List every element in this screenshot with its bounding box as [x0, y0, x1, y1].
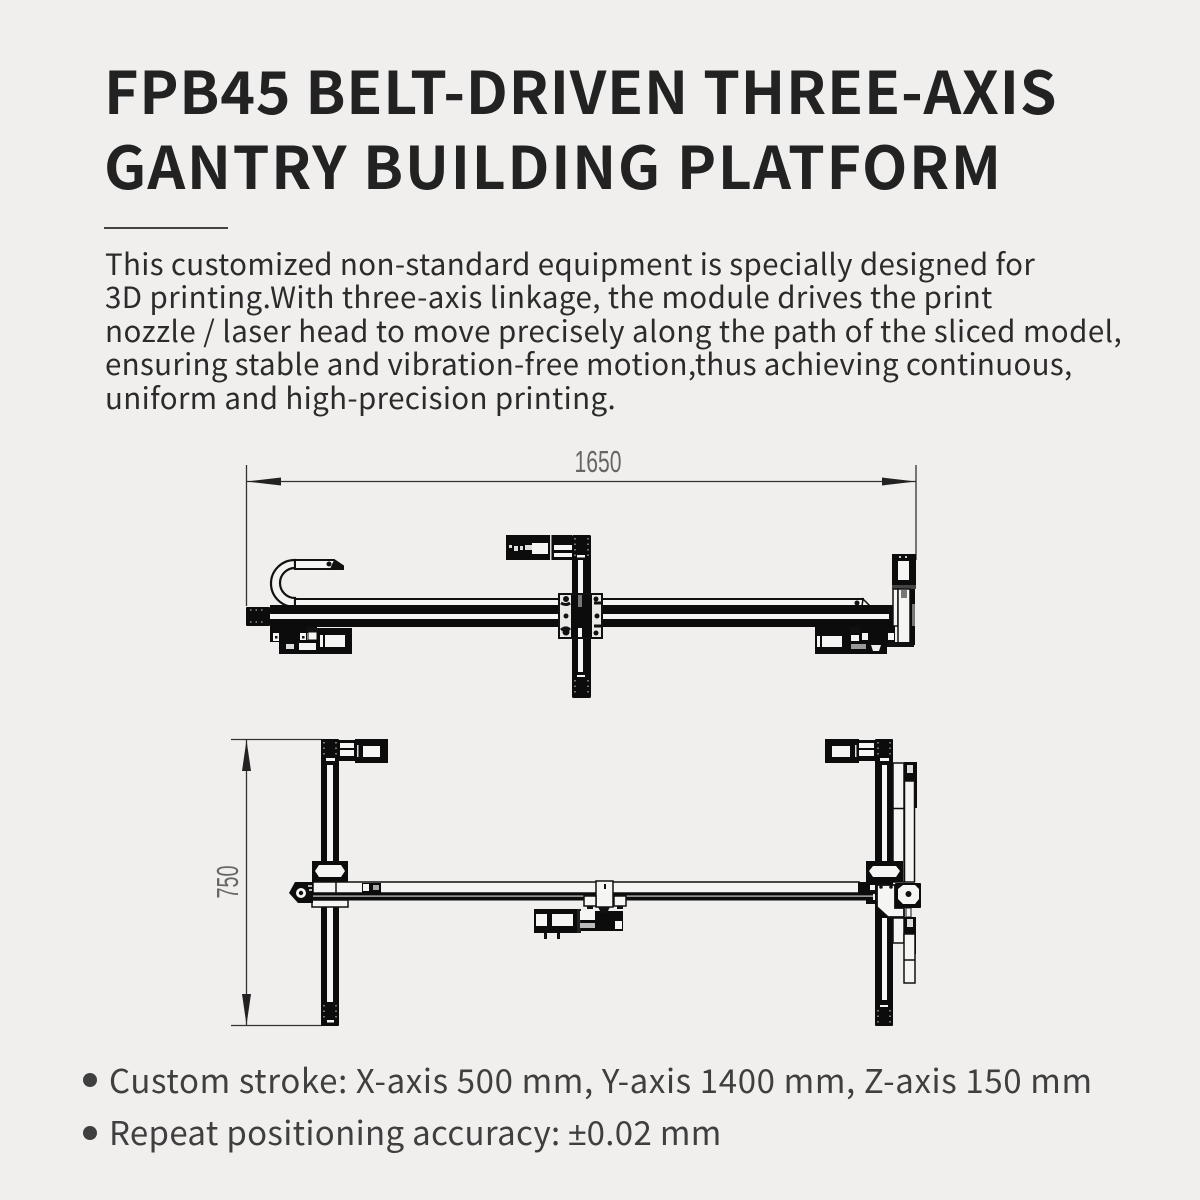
description text block — [105, 242, 1122, 418]
right Y rail — [875, 739, 893, 1026]
carriage plate — [559, 594, 602, 638]
right drive motor — [815, 627, 895, 654]
title: GANTRY BUILDING PLATFORM — [104, 121, 1003, 206]
heading divider — [104, 227, 228, 229]
dimension: depth 750: 750 — [210, 866, 245, 898]
dimension: width 1650 — [246, 444, 916, 606]
description text block: uniform and high-precision printing. — [105, 376, 616, 418]
title — [104, 46, 1057, 206]
description text block: 3D printing.With three-axis linkage, the module drives the print — [105, 275, 993, 317]
left nose bracket — [289, 882, 313, 903]
right Z column — [893, 762, 917, 983]
description text block: This customized non-standard equipment is specially designed for — [105, 242, 1035, 284]
X motor — [534, 907, 623, 939]
top view drawing with 1650 dimension — [246, 444, 916, 698]
description text block: ensuring stable and vibration-free motion,thus achieving continuous, — [105, 342, 1073, 384]
left Y rail — [321, 739, 339, 1026]
Z axis motor — [506, 535, 572, 560]
left Y motor — [339, 739, 388, 763]
left drive motor — [270, 627, 352, 654]
right vertical assembly — [887, 554, 916, 647]
right Y motor — [825, 739, 875, 763]
title: FPB45 BELT-DRIVEN THREE-AXIS — [104, 46, 1057, 131]
X carriage — [584, 881, 626, 909]
drag chain — [271, 560, 870, 607]
right Y carriage — [866, 861, 903, 882]
bullet: custom stroke: Custom stroke: X-axis 500 mm, Y-axis 1400 mm, Z-axis 150 mm — [109, 1055, 1093, 1103]
dimension: width 1650: 1650 — [574, 444, 622, 479]
bullet: repeat positioning accuracy: Repeat positioning accuracy: ±0.02 mm — [109, 1107, 722, 1155]
dimension: depth 750 — [210, 740, 322, 1026]
X beam — [313, 882, 877, 904]
feature list — [83, 1055, 1093, 1155]
left Y carriage — [312, 861, 348, 907]
bottom view drawing with 750 dimension — [210, 739, 921, 1026]
Z axis column — [572, 535, 591, 698]
right Z motor and bracket — [877, 883, 921, 917]
horizontal rail — [246, 605, 896, 627]
description text block: nozzle / laser head to move precisely along the path of the sliced model, — [105, 308, 1122, 350]
